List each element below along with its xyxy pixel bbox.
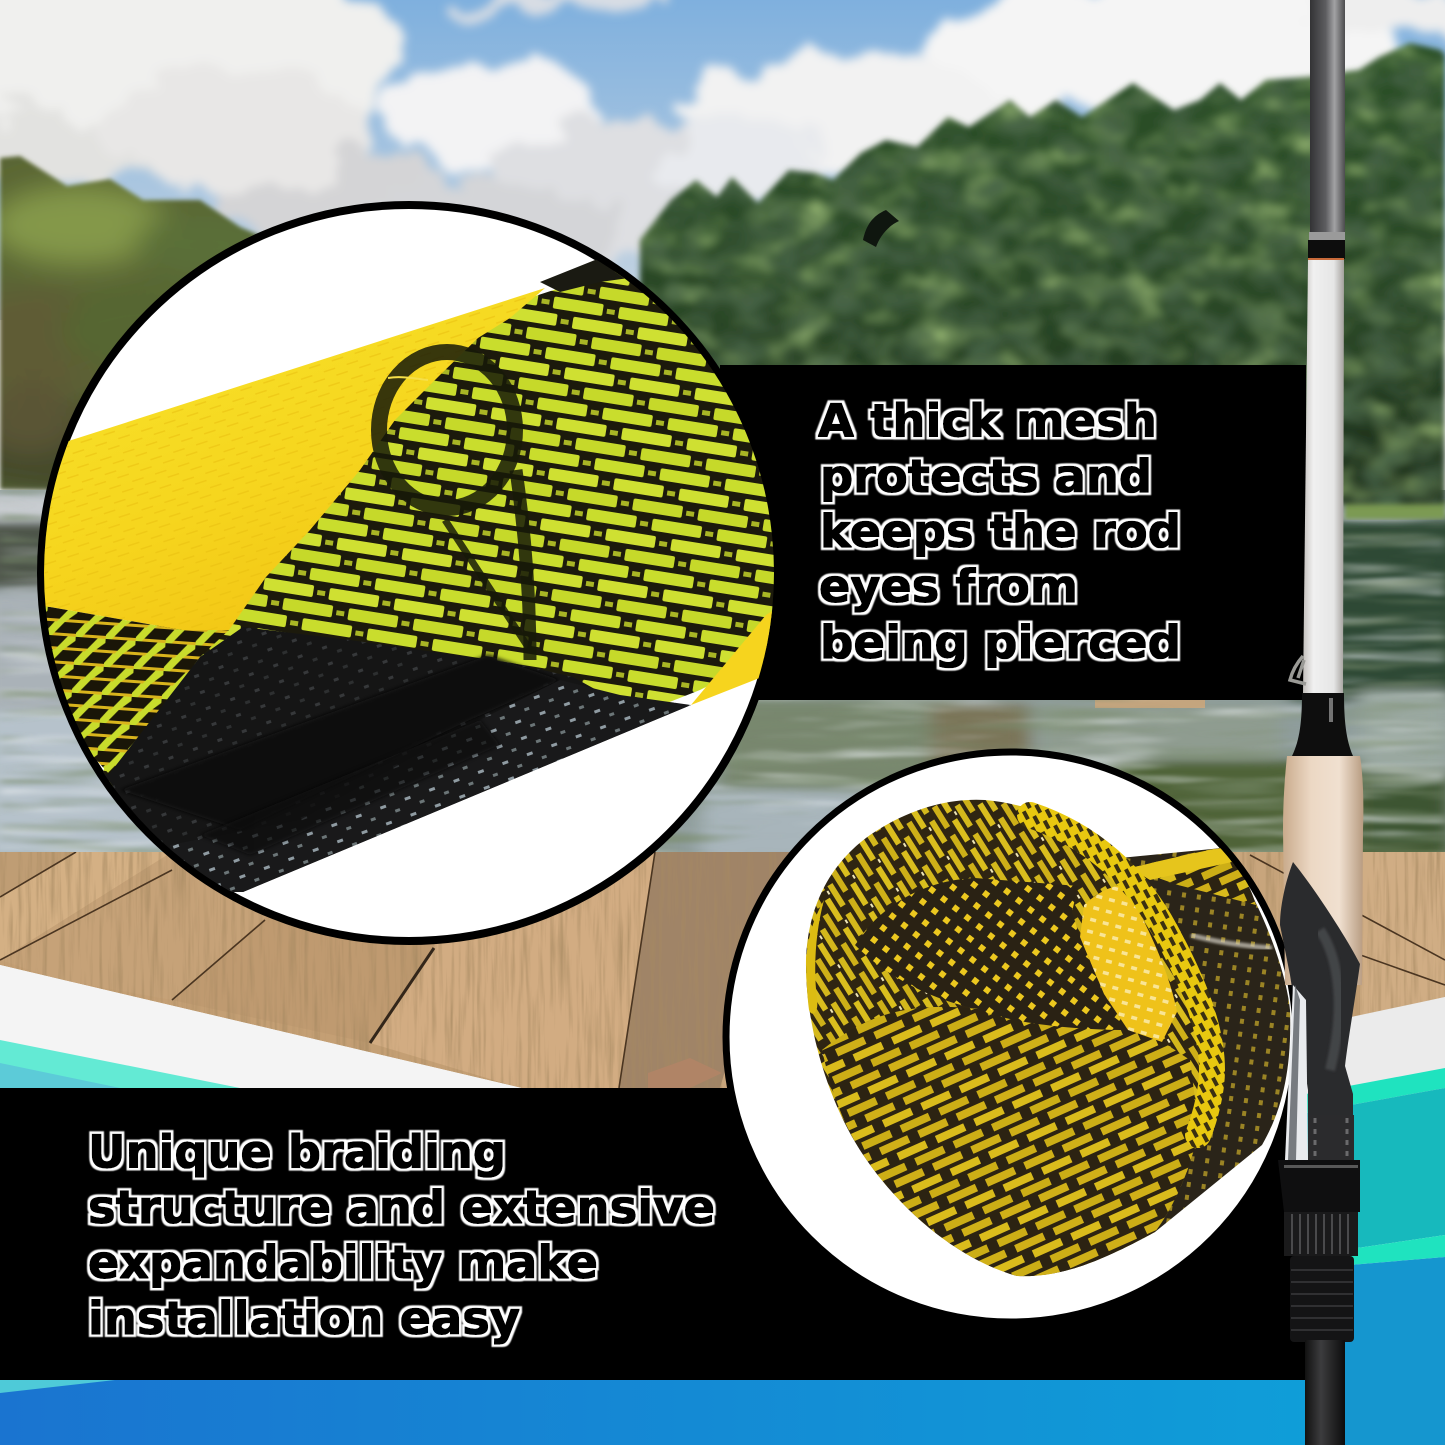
silver reel seat strip bbox=[1285, 985, 1308, 1160]
cork handle bbox=[1283, 756, 1363, 985]
upper carbon blank bbox=[1310, 0, 1345, 233]
text: braiding and expandability: installation easy bbox=[88, 1292, 520, 1345]
text: mesh protection: protects and bbox=[820, 450, 1152, 503]
small dark rod fragment in the trees bbox=[863, 210, 899, 247]
hook keeper bbox=[1290, 656, 1306, 684]
yellow wedge on the far right bbox=[691, 611, 772, 705]
sleeve outer body bbox=[806, 800, 1221, 1276]
knurled ring bbox=[1284, 1212, 1358, 1256]
text: mesh protection: eyes from bbox=[819, 560, 1078, 613]
panel: top black text box bbox=[720, 365, 1306, 700]
panel: bottom black text box bbox=[0, 1088, 1306, 1380]
braided rim bbox=[1030, 815, 1212, 1135]
seat lower block bbox=[1309, 1115, 1354, 1163]
text: mesh protection bbox=[818, 394, 1181, 669]
text: mesh protection: being pierced bbox=[820, 616, 1181, 669]
bottom blue band bbox=[0, 1380, 1320, 1445]
reel seat trigger bbox=[1280, 862, 1360, 1160]
rear grip bbox=[1290, 1256, 1354, 1342]
text: braiding and expandability: Unique braiding bbox=[88, 1126, 506, 1178]
background: tree line right bbox=[635, 38, 1445, 508]
inner yellow window bbox=[1080, 885, 1177, 1042]
small mesh patch lower left bbox=[46, 606, 229, 773]
text: braiding and expandability bbox=[88, 1126, 715, 1345]
diagonal white and teal panel, right bbox=[1290, 997, 1445, 1445]
fishing rod bbox=[1278, 0, 1363, 1445]
ferrule bbox=[1309, 232, 1345, 240]
inner dark mesh bbox=[855, 878, 1128, 1030]
tube mesh body bbox=[103, 271, 774, 786]
background: sky and clouds bbox=[0, 0, 1445, 320]
black winding check bbox=[1292, 693, 1353, 756]
solid yellow section bbox=[30, 288, 545, 630]
text: mesh protection: A thick mesh bbox=[818, 394, 1157, 448]
background: tree line left bbox=[0, 150, 275, 500]
diagonal white and teal corner, left bbox=[0, 965, 530, 1090]
rod guide ring seen through the mesh bbox=[379, 352, 530, 660]
background: lake water bbox=[0, 490, 1445, 860]
lower blank bbox=[1305, 1340, 1345, 1445]
yellow outer lip bbox=[806, 900, 824, 1014]
white mid section bbox=[1303, 260, 1344, 694]
lower herringbone weave bbox=[822, 1007, 1199, 1276]
locking collar bbox=[1278, 1160, 1360, 1212]
text: braiding and expandability: structure and extensive bbox=[88, 1181, 715, 1234]
rear top yellow edge bbox=[1130, 848, 1256, 905]
black sleeve section bbox=[60, 627, 691, 892]
text: mesh protection: keeps the rod bbox=[820, 505, 1181, 558]
circle callout: mesh close-up with rod guide bbox=[30, 205, 800, 941]
rear of tube bbox=[1126, 848, 1290, 1232]
circle callout: expanded braided sleeve opening bbox=[726, 752, 1296, 1322]
background: wooden dock bbox=[0, 852, 1445, 1092]
text: braiding and expandability: expandability make bbox=[88, 1236, 598, 1289]
